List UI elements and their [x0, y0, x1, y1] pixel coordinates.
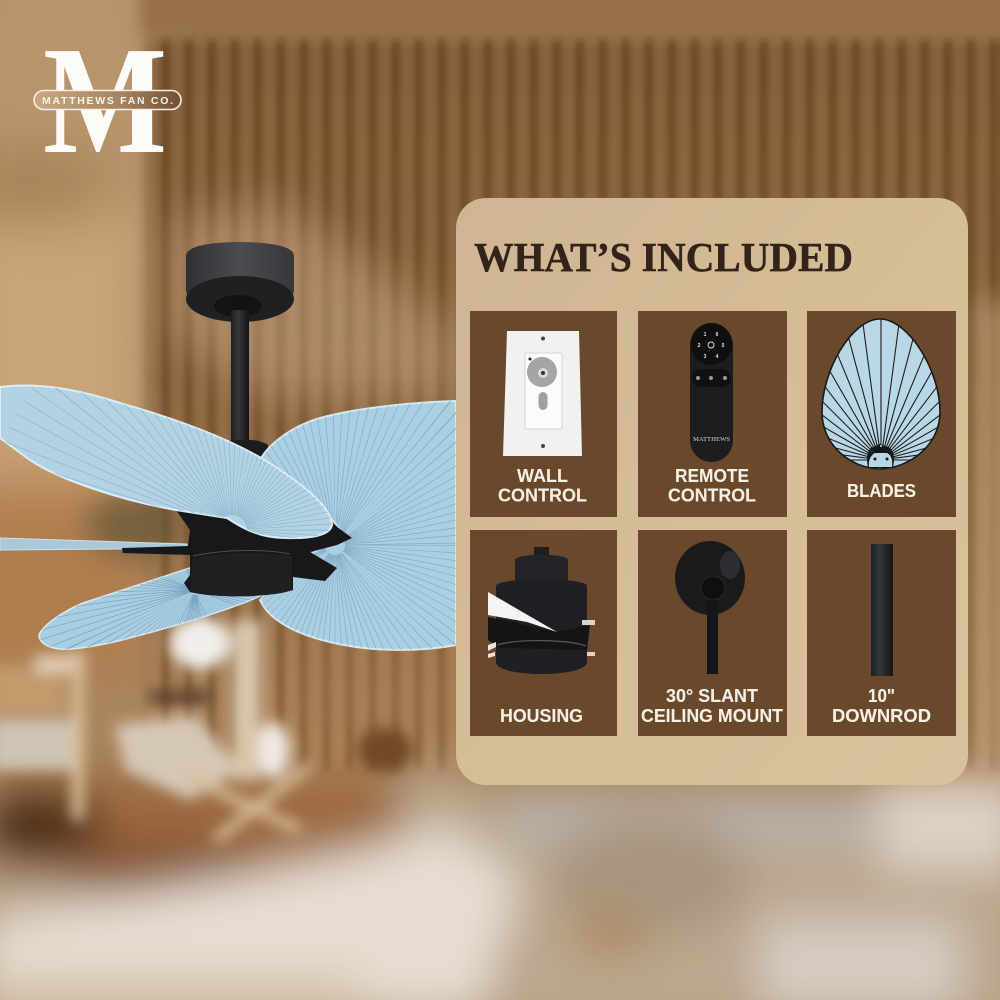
- logo name pill: [34, 90, 181, 110]
- label: [668, 465, 756, 506]
- fan canopy: [186, 242, 294, 322]
- fan yoke: [223, 439, 268, 470]
- icon: remote control: 6: [716, 332, 719, 338]
- logo name pill: MATTHEWS FAN CO.: [42, 95, 173, 107]
- label: REMOTE: [675, 465, 749, 486]
- edge-on left blade: [0, 538, 187, 550]
- ceiling fan: [0, 242, 456, 675]
- label: [832, 685, 931, 726]
- card: 30 degree slant ceiling mount: [638, 530, 787, 736]
- floor and furniture: [0, 772, 1000, 1000]
- icon: remote control: 1: [704, 332, 707, 338]
- label: 10": [868, 685, 895, 706]
- label: 30° SLANT: [666, 685, 759, 706]
- label: DOWNROD: [832, 705, 931, 726]
- title: WHAT’S INCLUDED: [474, 234, 853, 280]
- label: [641, 685, 784, 726]
- card: remote control: [638, 311, 787, 517]
- panel background: [456, 198, 968, 785]
- card: blades: [807, 311, 956, 517]
- card: wall control: [470, 311, 617, 517]
- label: CONTROL: [668, 484, 756, 506]
- icon: housing: [488, 547, 595, 674]
- icon: remote control: 2: [698, 343, 701, 349]
- fan downrod: [231, 310, 249, 450]
- icon: downrod: [871, 544, 893, 676]
- icon: remote control: MATTHEWS: [693, 436, 730, 443]
- lower-left blade: [38, 567, 264, 650]
- icon: remote control: 4: [716, 354, 719, 360]
- motor housing and brackets: [122, 510, 352, 596]
- card: 10 inch downrod: [807, 530, 956, 736]
- logo: Matthews Fan Co.: [34, 16, 181, 186]
- right blades: [258, 400, 456, 651]
- label: CEILING MOUNT: [641, 705, 784, 726]
- upper-left blade: [0, 384, 333, 540]
- label: WALL: [517, 465, 568, 486]
- icon: ceiling mount: [675, 541, 745, 674]
- label: CONTROL: [498, 484, 587, 506]
- label: BLADES: [847, 480, 916, 501]
- icon: wall control: [503, 331, 582, 456]
- label: HOUSING: [500, 705, 583, 726]
- plant behind the fan: [87, 493, 183, 557]
- logo letter M: M: [43, 16, 167, 186]
- panel: what's included: [456, 198, 1000, 785]
- label: [498, 465, 587, 506]
- icon: blade: [821, 318, 941, 470]
- icon: remote control: 5: [722, 343, 725, 349]
- card: housing: [470, 530, 617, 736]
- light patches on wall: [170, 200, 460, 740]
- icon: remote control: 3: [704, 354, 707, 360]
- icon: remote control: [690, 323, 733, 462]
